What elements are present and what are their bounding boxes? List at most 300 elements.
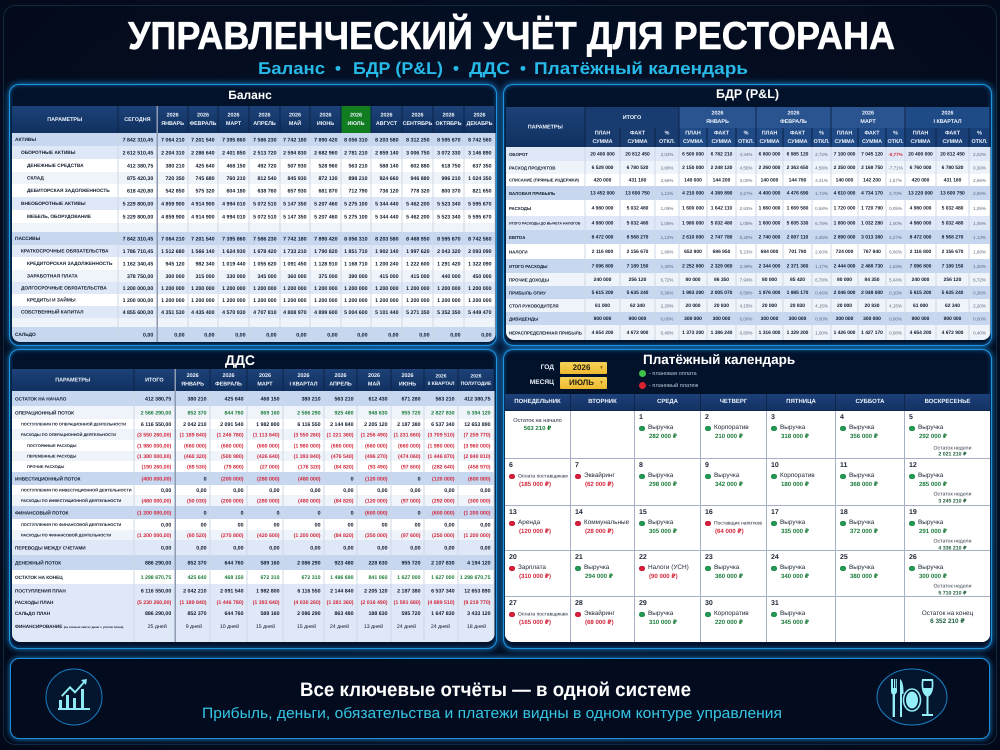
row: расходы по операционной деятельности: (1 256 490)	[361, 432, 388, 438]
row: расходы по финансовой деятельности: (1 200 000)	[294, 532, 320, 538]
row: прибыль ОПиУ: 5 635 240	[627, 290, 648, 296]
row: инвестиционный поток: (200 000)	[221, 476, 244, 482]
row: стол руководителя: 20 000	[837, 303, 852, 309]
cell: день 10: Корпоратив	[780, 472, 815, 479]
row: прибыль ОПиУ: 2 048 000	[861, 290, 883, 296]
row: расходы по операционной деятельности: (1 221 360)	[327, 432, 354, 438]
row: краткосрочные обязательства: 1 624 930	[222, 248, 246, 254]
row: финансирование: 18 дней	[467, 624, 486, 630]
table header: показатели: %	[665, 130, 669, 136]
row: долгосрочные обязательства: 1 200 000	[161, 285, 184, 291]
row: валовая прибыль: 2,70%	[889, 191, 902, 196]
cell: день 2: Корпоратив	[714, 424, 749, 431]
row: переменные расходы: (2 840 810)	[464, 453, 490, 459]
row: валовая прибыль: 13 600 750	[940, 191, 965, 196]
row: валовая прибыль: 4 389 890	[711, 191, 732, 196]
row: расходы план: (4 030 260)	[294, 599, 320, 605]
cell: день 12	[905, 459, 990, 506]
row: прочие доходы: 240 000	[594, 277, 611, 283]
row: собственный капитал: 4 707 810	[253, 309, 276, 315]
row: остаток на конец: 468 150	[225, 574, 244, 580]
row: инвестиционный поток: 0	[204, 476, 206, 482]
row: прочие расходы: (282 640)	[432, 464, 454, 470]
row: дебиторская задолженность: 638 760	[258, 188, 276, 194]
row: налоги: 767 940	[863, 249, 881, 255]
row: внеоборотные активы: 4 859 900	[161, 201, 184, 207]
row: активы: 7 742 180	[283, 137, 306, 143]
row: финансирование: 24 дней	[431, 624, 450, 630]
row: финансирование: 9 дней	[186, 624, 202, 630]
weekday: воскресенье	[905, 394, 990, 411]
row: сальдо план: 852 370	[188, 610, 206, 616]
row: EBITDA: EBITDA	[509, 235, 525, 240]
row: расходы по инвестиционной деятельности: (300 000)	[468, 498, 490, 504]
row: кредиторская задолженность: 1 168 710	[344, 261, 368, 267]
row: нераспределенная прибыль: 1 316 000	[759, 330, 780, 336]
row: расходы: 0,58%	[815, 206, 828, 211]
row: стол руководителя: 4,15%	[815, 303, 828, 308]
row: поступления по финансовой деятельности: 00	[415, 522, 420, 528]
row: налоги: 6,06%	[889, 249, 902, 254]
row: поступления по инвестиционной деятельности	[12, 485, 494, 495]
cell: день 20	[505, 551, 571, 597]
row: сальдо: 0,00	[450, 332, 460, 338]
row: налоги: 1,88%	[661, 249, 673, 254]
table header: показатели: СУММА	[759, 138, 780, 144]
row: переменные расходы	[27, 454, 490, 460]
row: расходы по операционной деятельности: (3 550 260,00)	[137, 432, 171, 438]
panel: Баланс	[9, 84, 497, 346]
cell: день 26	[905, 551, 990, 597]
row: финансирование: 24 дней	[330, 624, 349, 630]
row: активы: 7 201 540	[191, 137, 214, 143]
cell: день 4: 4	[840, 414, 844, 420]
row: остаток на конец: 672 310	[302, 574, 320, 580]
row: итого расходы: 1,17%	[815, 264, 828, 269]
row: валовая прибыль: 4 210 000	[682, 191, 704, 196]
row: прибыль ОПиУ: 5 615 200	[910, 290, 931, 296]
row: пассивы: 7 586 230	[253, 236, 276, 242]
row: остаток на начало: 468 150	[261, 396, 280, 402]
row: налоги: 2 116 800	[910, 249, 931, 255]
row: поступления план: 2 205 120	[364, 588, 388, 594]
row: мебель, оборудование: 4 914 900	[191, 214, 214, 220]
row: заработная плата: 390 000	[349, 273, 368, 279]
row: активы: 7 842 310,45	[123, 137, 153, 143]
subtitle: БДР (P&L)	[353, 59, 443, 78]
cell: день 20: (310 000 ₽)	[519, 573, 551, 580]
table header: показатели: %	[744, 130, 748, 136]
row: расходы: РАСХОДЫ	[509, 206, 531, 211]
row: операционный поток: 852 370	[188, 410, 206, 416]
cell: день 3	[767, 411, 836, 459]
row: прибыль ОПиУ: 0,46%	[815, 290, 828, 295]
table header: Баланс: 2026	[197, 112, 209, 118]
row: нераспределенная прибыль: 4 654 200	[592, 330, 613, 336]
table header: ДДС: ПАРАМЕТРЫ	[55, 377, 90, 383]
cell: день 13: 13	[509, 508, 517, 516]
row: нераспределенная прибыль: 4 672 900	[942, 330, 963, 336]
row: собственный капитал: 4 808 970	[283, 309, 306, 315]
cell: день 12: 12	[909, 462, 917, 468]
row: заработная плата: 440 000	[442, 273, 460, 279]
row: стол руководителя: 61 000	[595, 303, 610, 309]
row: расходы по операционной деятельности: (3 709 510)	[428, 432, 454, 438]
row: поступления по инвестиционной деятельности: 0,00	[444, 487, 454, 493]
row: расходы план: (2 016 490)	[361, 599, 388, 605]
weekday: пятница	[767, 394, 836, 411]
row: расходы по инвестиционной деятельности: (97 000)	[401, 498, 420, 504]
row: дивиденды: 0,00%	[815, 316, 828, 321]
row: расходы по операционной деятельности: (1 113 640)	[253, 432, 280, 438]
cell: empty	[836, 597, 905, 642]
row: списание: 431 180	[944, 178, 961, 183]
row: переменные расходы: (476 540)	[331, 453, 354, 459]
row: дивиденды: 300 000	[863, 316, 881, 322]
cell: день 27: Оплата поставщикам	[518, 611, 568, 616]
row: пассивы: 8 742 560	[468, 236, 492, 242]
table header: ДДС: МАЙ	[368, 381, 380, 387]
cell: день 18: 372 000 ₽	[850, 528, 878, 535]
row: остаток на конец: 841 060	[369, 574, 388, 580]
row: EBITDA: 2 807 110	[787, 235, 808, 240]
row: EBITDA: 2 610 000	[682, 235, 704, 240]
row: расходы план: (1 591 680)	[394, 599, 420, 605]
row: денежный поток: 852 370	[188, 560, 206, 566]
row: расходы по операционной деятельности: (3 550 260)	[294, 432, 320, 438]
row: нераспределенная прибыль: 4 672 900	[627, 330, 648, 336]
table header: Баланс: ОКТЯБРЬ	[435, 120, 462, 126]
row: расходы по операционной деятельности	[21, 432, 490, 438]
row: расходы: 0,05%	[889, 206, 902, 211]
table header: Баланс: 2026	[380, 112, 393, 118]
row: постоянные расходы: (1 980 000)	[428, 443, 454, 449]
row: списание: 142 200	[863, 178, 881, 183]
table header: Баланс: 2026	[442, 112, 455, 118]
row: расход продуктов: 6 780 520	[942, 165, 963, 171]
cell: день 15	[635, 506, 701, 551]
row: активы: 8 312 250	[406, 137, 430, 143]
row: кредиты и займы: 1 200 000	[375, 297, 398, 303]
row: расходы: 1 720 000	[834, 206, 855, 211]
row: мебель, оборудование: 5 595 670	[468, 214, 492, 220]
legend text: плановая оплата: - плановая оплата	[649, 370, 697, 376]
row: финансирование: 15 дней	[297, 624, 316, 630]
row: прочие доходы: 80 000	[686, 277, 700, 283]
cell: день 22: 22	[639, 554, 647, 560]
row: поступления по финансовой деятельности: 00	[274, 522, 280, 528]
row: денежные средства: 602 880	[411, 163, 430, 169]
row: мебель, оборудование: 4 859 900	[161, 214, 184, 220]
row: кредиты и займы: 1 200 000	[191, 297, 214, 303]
heading: Платёжный календарь: Платёжный календарь	[643, 352, 795, 367]
table header: ДДС: 2026	[401, 373, 414, 379]
cell: день 19: 19	[909, 508, 917, 516]
table header: показатели: СУММА	[862, 138, 882, 144]
row: налоги: 5,23%	[740, 249, 752, 254]
footer subtitle: Прибыль, деньги, обязательства и платежи видны в одном контуре управления	[202, 705, 782, 722]
row: нераспределенная прибыль: 1 373 200	[682, 330, 704, 336]
row: кредиторская задолженность: 1 200 240	[375, 261, 398, 267]
row: итого расходы до вычета налогов: 1 600 000	[759, 221, 780, 226]
row: итого расходы: 1,30%	[661, 264, 673, 269]
legend dot: плановый платеж	[639, 382, 646, 389]
row: переменные расходы: (1 446 870)	[428, 453, 454, 459]
row: склад	[27, 176, 492, 181]
row: кредиты и займы: 1 200 000	[468, 297, 492, 303]
row: расходы по финансовой деятельности: (97 600)	[401, 532, 420, 538]
row: расходы: 1 660 000	[759, 206, 780, 211]
row: прочие доходы: 6,78%	[815, 277, 828, 282]
row: финансовый поток: (1 200 000)	[464, 510, 490, 516]
row: оборот: ОБОРОТ	[509, 152, 528, 157]
row: операционный поток: 5 394 120	[467, 410, 490, 416]
row: мебель, оборудование: 5 275 100	[344, 214, 368, 220]
cell: день 27: 27	[509, 600, 517, 606]
row: расходы план: (1 446 780)	[217, 599, 244, 605]
cell: день 19: 291 000 ₽	[919, 528, 947, 535]
row: поступления по операционной деятельности: 6 116 550,00	[141, 421, 171, 427]
row: инвестиционный поток	[12, 472, 494, 485]
row: поступления по финансовой деятельности: ПОСТУПЛЕНИЯ ПО ФИНАНСОВОЙ ДЕЯТЕЛЬНОСТИ	[21, 523, 121, 527]
row: поступления по инвестиционной деятельности: ПОСТУПЛЕНИЯ ПО ИНВЕСТИЦИОННОЙ ДЕЯТЕЛЬНОСТИ	[21, 488, 132, 493]
table header: периоды: 2026	[712, 110, 724, 116]
row: списание: 2,66%	[661, 178, 673, 183]
row: сальдо план: 1 647 830	[431, 610, 454, 616]
row: внеоборотные активы	[12, 197, 494, 210]
row: налоги: 652 800	[684, 249, 702, 255]
selector: год	[560, 362, 607, 374]
cell: день 2	[701, 411, 767, 459]
row: инвестиционный поток: 0	[418, 476, 420, 482]
row: финансирование: 24 дней	[397, 624, 416, 630]
cell: день 12: 285 000 ₽	[919, 481, 947, 488]
row: дивиденды: 900 000	[944, 316, 961, 322]
cell: день 5	[905, 411, 990, 459]
row: финансовый поток: 0	[351, 510, 354, 516]
row: валовая прибыль: 4,27%	[740, 191, 752, 196]
table header: ДДС: II КВАРТАЛ	[428, 381, 454, 386]
cell: день 2: 2	[705, 414, 709, 420]
row: финансовый поток: (600 000)	[432, 510, 454, 516]
row: кредиты и займы: 1 200 000	[253, 297, 276, 303]
cell: день 9	[701, 459, 767, 506]
cell: день 9: Выручка	[714, 472, 739, 479]
cell: день 28: (68 000 ₽)	[585, 619, 614, 626]
row: стол руководителя: 2,20%	[973, 303, 986, 308]
cell: день 8: 298 000 ₽	[649, 481, 677, 488]
row: постоянные расходы: (660 000)	[331, 443, 354, 449]
table header: показатели: ПЛАН	[837, 130, 852, 136]
cell: день 21	[571, 551, 635, 597]
row: поступления план: ПОСТУПЛЕНИЯ ПЛАН	[15, 588, 66, 594]
row: денежные средства: 563 210	[349, 163, 368, 169]
row: кредиторская задолженность: 1 322 090	[468, 261, 492, 267]
row: расходы по финансовой деятельности: (1 200 000)	[464, 532, 490, 538]
row: поступления по операционной деятельности: 12 653 890	[464, 421, 490, 427]
table header: ДДС: 2026	[222, 373, 235, 379]
row: налоги: 684 000	[761, 249, 778, 255]
row: постоянные расходы: (660 000)	[221, 443, 244, 449]
label: год: ГОД	[541, 364, 554, 371]
row: оборот: 6 500 000	[682, 152, 704, 157]
row: заработная плата: 360 000	[288, 273, 306, 279]
row: долгосрочные обязательства: 1 200 000	[344, 285, 368, 291]
row: оборотные активы: 3 146 890	[468, 150, 492, 156]
table header: Баланс: ИЮНЬ	[317, 120, 334, 126]
row: заработная плата	[27, 274, 492, 279]
cell: день 14	[571, 506, 635, 551]
weekday: воскресенье: ВОСКРЕСЕНЬЕ	[925, 399, 970, 405]
row: дивиденды: ДИВИДЕНДЫ	[509, 316, 538, 321]
row: оборот: 20 400 000	[590, 152, 615, 157]
row: финансовый поток: 0	[418, 510, 420, 516]
row: итого расходы: 7 096 800	[910, 264, 931, 269]
table header: показатели: %	[893, 130, 898, 136]
row: операционный поток: 2 566 290,00	[141, 410, 171, 416]
table header: показатели: ПЛАН	[762, 130, 777, 136]
row: пассивы: 8 595 670	[437, 236, 460, 242]
row: склад: 845 930	[288, 175, 306, 181]
row: расходы по операционной деятельности: (7 259 770)	[464, 432, 490, 438]
row: заработная плата: 300 000	[166, 273, 184, 279]
row: налоги: 701 780	[789, 249, 806, 255]
row: операционный поток	[15, 410, 490, 416]
row: прочие расходы	[12, 461, 494, 472]
row: денежные средства: 492 720	[258, 163, 276, 169]
row: списание: 140 000	[836, 178, 853, 183]
row: стол руководителя: 62 340	[630, 303, 645, 309]
row: поступления по инвестиционной деятельности: 0,00	[410, 487, 420, 493]
cell: остаток на конец	[905, 597, 990, 642]
row: дебиторская задолженность: 800 370	[442, 188, 460, 194]
row: постоянные расходы: (1 980 000)	[294, 443, 320, 449]
row: оборот: 6 800 000	[759, 152, 780, 157]
row: денежный поток: 2 107 830	[431, 560, 454, 566]
row: стол руководителя: 20 000	[762, 303, 777, 309]
row: поступления по операционной деятельности: 1 982 800	[256, 421, 280, 427]
row: сальдо: 0,00	[357, 332, 368, 338]
row: итого расходы: 2 329 060	[711, 264, 732, 269]
cell: день 19: Выручка	[918, 519, 943, 526]
row: итого расходы: 2 371 360	[787, 264, 808, 269]
row: финансирование: 13 дней	[364, 624, 383, 630]
row: оборотные активы: 2 612 510,45	[123, 150, 153, 156]
row: постоянные расходы	[12, 440, 494, 451]
table header: Баланс: 2026	[167, 112, 179, 118]
cell: день 16: (64 000 ₽)	[715, 528, 744, 535]
row: прочие расходы: (97 600)	[401, 464, 420, 470]
row: краткосрочные обязательства: 1 790 820	[314, 248, 338, 254]
weekday: вторник: ВТОРНИК	[588, 399, 617, 405]
row: мебель, оборудование: 5 462 200	[406, 214, 430, 220]
row: стол руководителя: 62 340	[945, 303, 960, 309]
row: мебель, оборудование	[12, 210, 494, 223]
row: расход продуктов: 4,58%	[815, 165, 828, 170]
row: расход продуктов: 2 248 120	[711, 165, 732, 171]
row: расходы: 1 642 110	[711, 206, 732, 211]
cell: день 31	[767, 597, 836, 642]
cell: день 31: 345 000 ₽	[781, 619, 809, 626]
table header: Баланс: ДЕКАБРЬ	[466, 120, 492, 126]
row: сальдо: 0,00	[204, 332, 214, 338]
row: расходы: 2,63%	[740, 206, 752, 211]
row: переводы между счетами: ПЕРЕВОДЫ МЕЖДУ СЧЕТАМИ	[15, 545, 86, 551]
row: кредиты и займы: 1 200 000	[283, 297, 306, 303]
row: расходы: 4 980 000	[592, 206, 613, 211]
cell: день 30: 220 000 ₽	[715, 619, 743, 626]
row: внеоборотные активы: 5 207 460	[314, 201, 338, 207]
row: склад: 720 350	[166, 175, 184, 181]
row: нераспределенная прибыль: 1 386 240	[711, 330, 732, 336]
row: расходы по финансовой деятельности: (84 820)	[334, 532, 354, 538]
row: денежные средства: 588 140	[380, 163, 398, 169]
row: активы: 8 203 580	[375, 137, 398, 143]
row: активы: АКТИВЫ	[15, 137, 36, 143]
row: сальдо: 0,00	[266, 332, 276, 338]
row: финансирование: 10 дней	[220, 624, 239, 630]
row: итого расходы: 1,83%	[889, 264, 902, 269]
row: расходы по инвестиционной деятельности: РАСХОДЫ ПО ИНВЕСТИЦИОННОЙ ДЕЯТЕЛЬНОСТИ	[21, 499, 121, 503]
row: дивиденды: 300 000	[684, 316, 702, 322]
row: внеоборотные активы: 5 072 510	[253, 201, 276, 207]
table header: Баланс: ИЮЛЬ	[348, 120, 364, 126]
row: собственный капитал: 4 855 600,00	[123, 309, 153, 315]
row: расходы план	[12, 597, 494, 607]
cell: день 19: 4 336 210 ₽	[938, 545, 967, 550]
row: налоги	[506, 244, 990, 259]
row: сальдо: 0,00	[296, 332, 306, 338]
row: расходы: 1 600 000	[682, 206, 704, 211]
row: расходы по операционной деятельности: (1 246 780)	[217, 432, 244, 438]
table: БДР	[506, 107, 991, 340]
row: прочие расходы: (69 530)	[187, 464, 206, 470]
row: нераспределенная прибыль: НЕРАСПРЕДЕЛЕННАЯ ПРИБЫЛЬ	[509, 330, 582, 335]
table header: периоды: 2026	[862, 110, 874, 116]
row: денежный поток	[12, 555, 494, 570]
table header: Баланс: ФЕВРАЛЬ	[190, 120, 216, 126]
row: поступления по операционной деятельности: 2 091 540	[220, 421, 244, 427]
row: расходы: 1 669 580	[787, 206, 808, 211]
row: нераспределенная прибыль: 4 654 200	[910, 330, 931, 336]
row: операционный поток: 925 480	[335, 410, 354, 416]
row: прибыль ОПиУ: 1 985 170	[787, 290, 808, 296]
cell: день 7: Эквайринг	[584, 472, 615, 479]
table header: Баланс: ПАРАМЕТРЫ	[47, 116, 82, 122]
row: расходы: 1,05%	[973, 206, 986, 211]
row: расход продуктов: 2 350 000	[834, 165, 855, 171]
row: остаток на начало: 612 430	[369, 396, 388, 402]
row: операционный поток: ОПЕРАЦИОННЫЙ ПОТОК	[15, 410, 74, 416]
row: итого расходы	[506, 259, 990, 273]
row: остаток на начало: 412 380,75	[464, 396, 490, 402]
row: активы: 8 742 560	[468, 137, 492, 143]
row: поступления по инвестиционной деятельности: 0,00	[377, 487, 388, 493]
row: дебиторская задолженность: 681 870	[319, 188, 338, 194]
table header: Баланс: 2026	[258, 112, 271, 118]
row: валовая прибыль: ВАЛОВАЯ ПРИБЫЛЬ	[509, 191, 555, 196]
row: внеоборотные активы: ВНЕОБОРОТНЫЕ АКТИВЫ	[21, 201, 86, 207]
cell: день 5: 5	[909, 414, 913, 420]
row: внеоборотные активы: 4 994 010	[222, 201, 246, 207]
row: остаток на начало: 425 640	[225, 396, 244, 402]
table header: периоды: ПАРАМЕТРЫ	[528, 124, 563, 130]
row: валовая прибыль: 13 220 000	[908, 191, 933, 196]
row: итого расходы: 7 096 800	[592, 264, 613, 269]
weekday: суббота	[836, 394, 905, 411]
row: поступления по финансовой деятельности: 0,00	[480, 522, 490, 528]
table header: периоды: I КВАРТАЛ	[933, 118, 962, 124]
